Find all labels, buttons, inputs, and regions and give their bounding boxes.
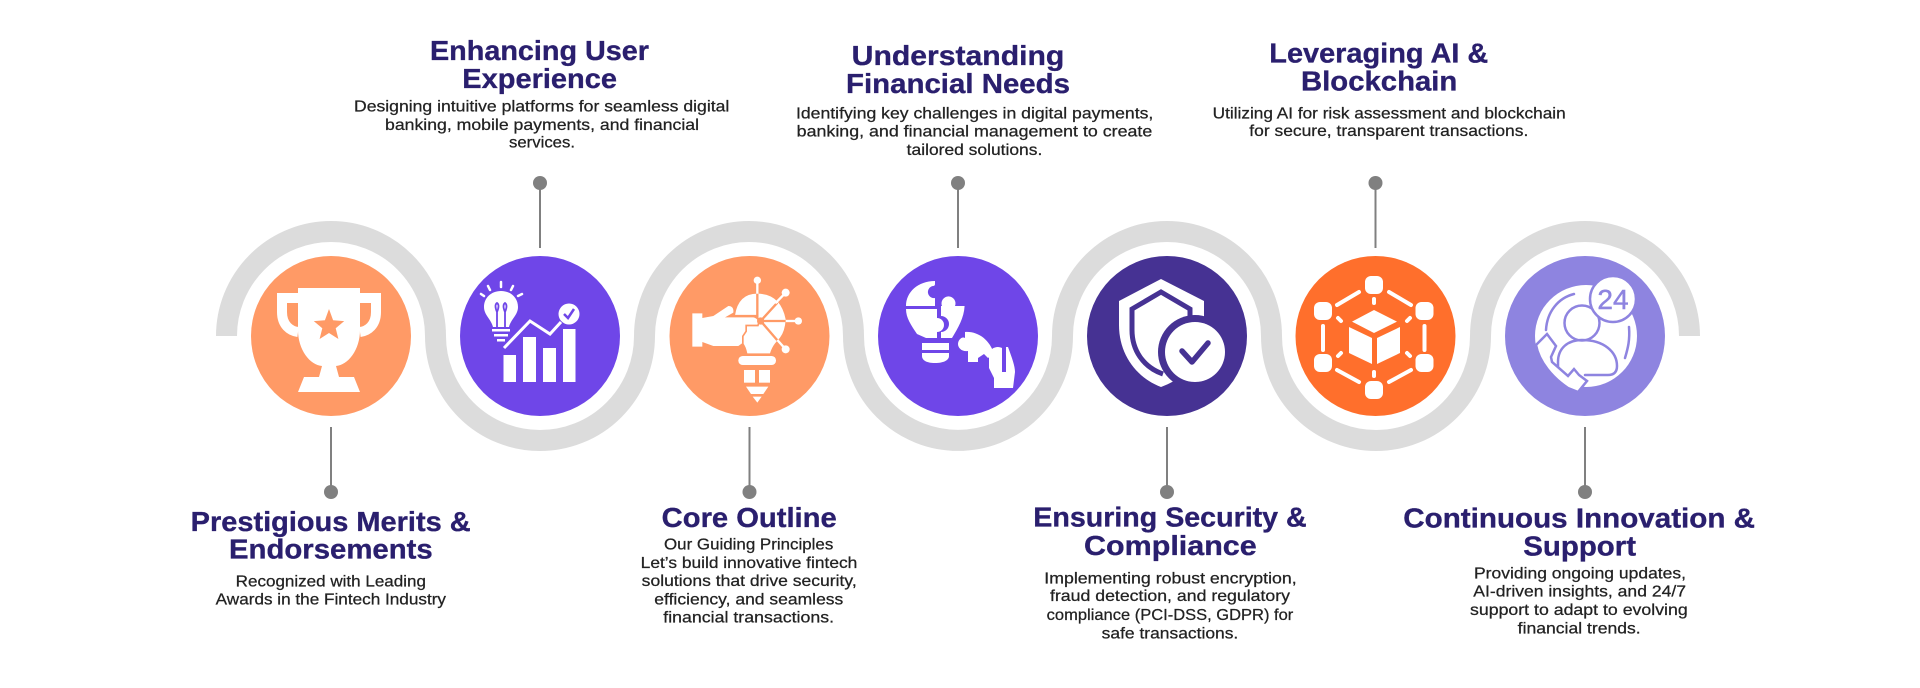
description: banking, mobile payments, and financial xyxy=(385,117,699,134)
24 badge label: 24 xyxy=(1597,284,1629,315)
description: banking, and financial management to create xyxy=(797,124,1152,141)
heading xyxy=(846,40,1070,99)
panel: understanding financial needs xyxy=(796,40,1153,416)
heading: Prestigious Merits & xyxy=(191,506,471,537)
description xyxy=(216,574,446,608)
description: AI-driven insights, and 24/7 xyxy=(1473,584,1686,601)
serpentine track xyxy=(226,231,1690,440)
heading: Ensuring Security & xyxy=(1033,502,1307,533)
connector xyxy=(1578,427,1592,499)
description: solutions that drive security, xyxy=(642,573,857,590)
panel: core outline xyxy=(641,256,857,627)
icon circle: hand and pencil bulb xyxy=(670,256,830,416)
heading: Continuous Innovation & xyxy=(1403,502,1755,533)
panel: enhancing user experience xyxy=(354,35,729,416)
panel: ensuring security and compliance xyxy=(1033,256,1307,642)
description: safe transactions. xyxy=(1102,625,1238,642)
description xyxy=(641,536,857,627)
description: Designing intuitive platforms for seamless digital xyxy=(354,99,729,116)
description: financial transactions. xyxy=(663,610,834,627)
description xyxy=(1470,565,1688,637)
connector xyxy=(1368,176,1382,248)
heading: Support xyxy=(1523,531,1636,562)
description: for secure, transparent transactions. xyxy=(1249,123,1528,140)
heading: Experience xyxy=(462,63,617,94)
description xyxy=(1044,570,1297,642)
heading xyxy=(1033,502,1307,561)
icon circle: bulb and growth chart xyxy=(460,256,620,416)
icon circle: trophy xyxy=(251,256,411,416)
description: fraud detection, and regulatory xyxy=(1050,588,1290,605)
description: compliance (PCI-DSS, GDPR) for xyxy=(1047,607,1294,624)
icon circle: puzzle bulb and hand xyxy=(878,256,1038,416)
description: Providing ongoing updates, xyxy=(1474,565,1686,582)
connector xyxy=(951,176,965,248)
panel: prestigious merits xyxy=(191,256,471,608)
description: Utilizing AI for risk assessment and blockchain xyxy=(1213,105,1566,122)
description xyxy=(354,99,729,152)
description: Implementing robust encryption, xyxy=(1044,570,1297,587)
description: efficiency, and seamless xyxy=(654,592,843,609)
panel: leveraging AI and blockchain xyxy=(1213,38,1566,416)
heading: Enhancing User xyxy=(430,35,649,66)
heading: Blockchain xyxy=(1301,66,1457,97)
heading: Financial Needs xyxy=(846,68,1070,99)
description: financial trends. xyxy=(1518,620,1641,637)
heading: Leveraging AI & xyxy=(1269,38,1488,69)
description: services. xyxy=(509,135,575,152)
connector xyxy=(742,427,756,499)
description: tailored solutions. xyxy=(907,142,1042,159)
description: Let’s build innovative fintech xyxy=(641,555,857,572)
panel: continuous innovation and support xyxy=(1403,256,1755,637)
icon circle: shield with check xyxy=(1087,256,1247,416)
heading xyxy=(430,35,649,94)
heading: Core Outline xyxy=(662,502,837,533)
icon circle: blockchain network xyxy=(1296,256,1456,416)
heading: Compliance xyxy=(1084,530,1257,561)
icon circle: 24/7 support xyxy=(1505,256,1665,416)
connector xyxy=(1160,427,1174,499)
description: support to adapt to evolving xyxy=(1470,602,1688,619)
connector xyxy=(533,176,547,248)
heading xyxy=(191,506,471,564)
heading xyxy=(1403,502,1755,562)
description xyxy=(1213,105,1566,140)
connector xyxy=(324,427,338,499)
description xyxy=(796,105,1153,159)
heading: Understanding xyxy=(852,40,1064,71)
description: Our Guiding Principles xyxy=(664,536,833,554)
heading: Endorsements xyxy=(229,534,433,564)
heading xyxy=(1269,38,1488,97)
description: Awards in the Fintech Industry xyxy=(216,592,446,608)
description: Recognized with Leading xyxy=(236,574,426,591)
description: Identifying key challenges in digital payments, xyxy=(796,105,1153,122)
